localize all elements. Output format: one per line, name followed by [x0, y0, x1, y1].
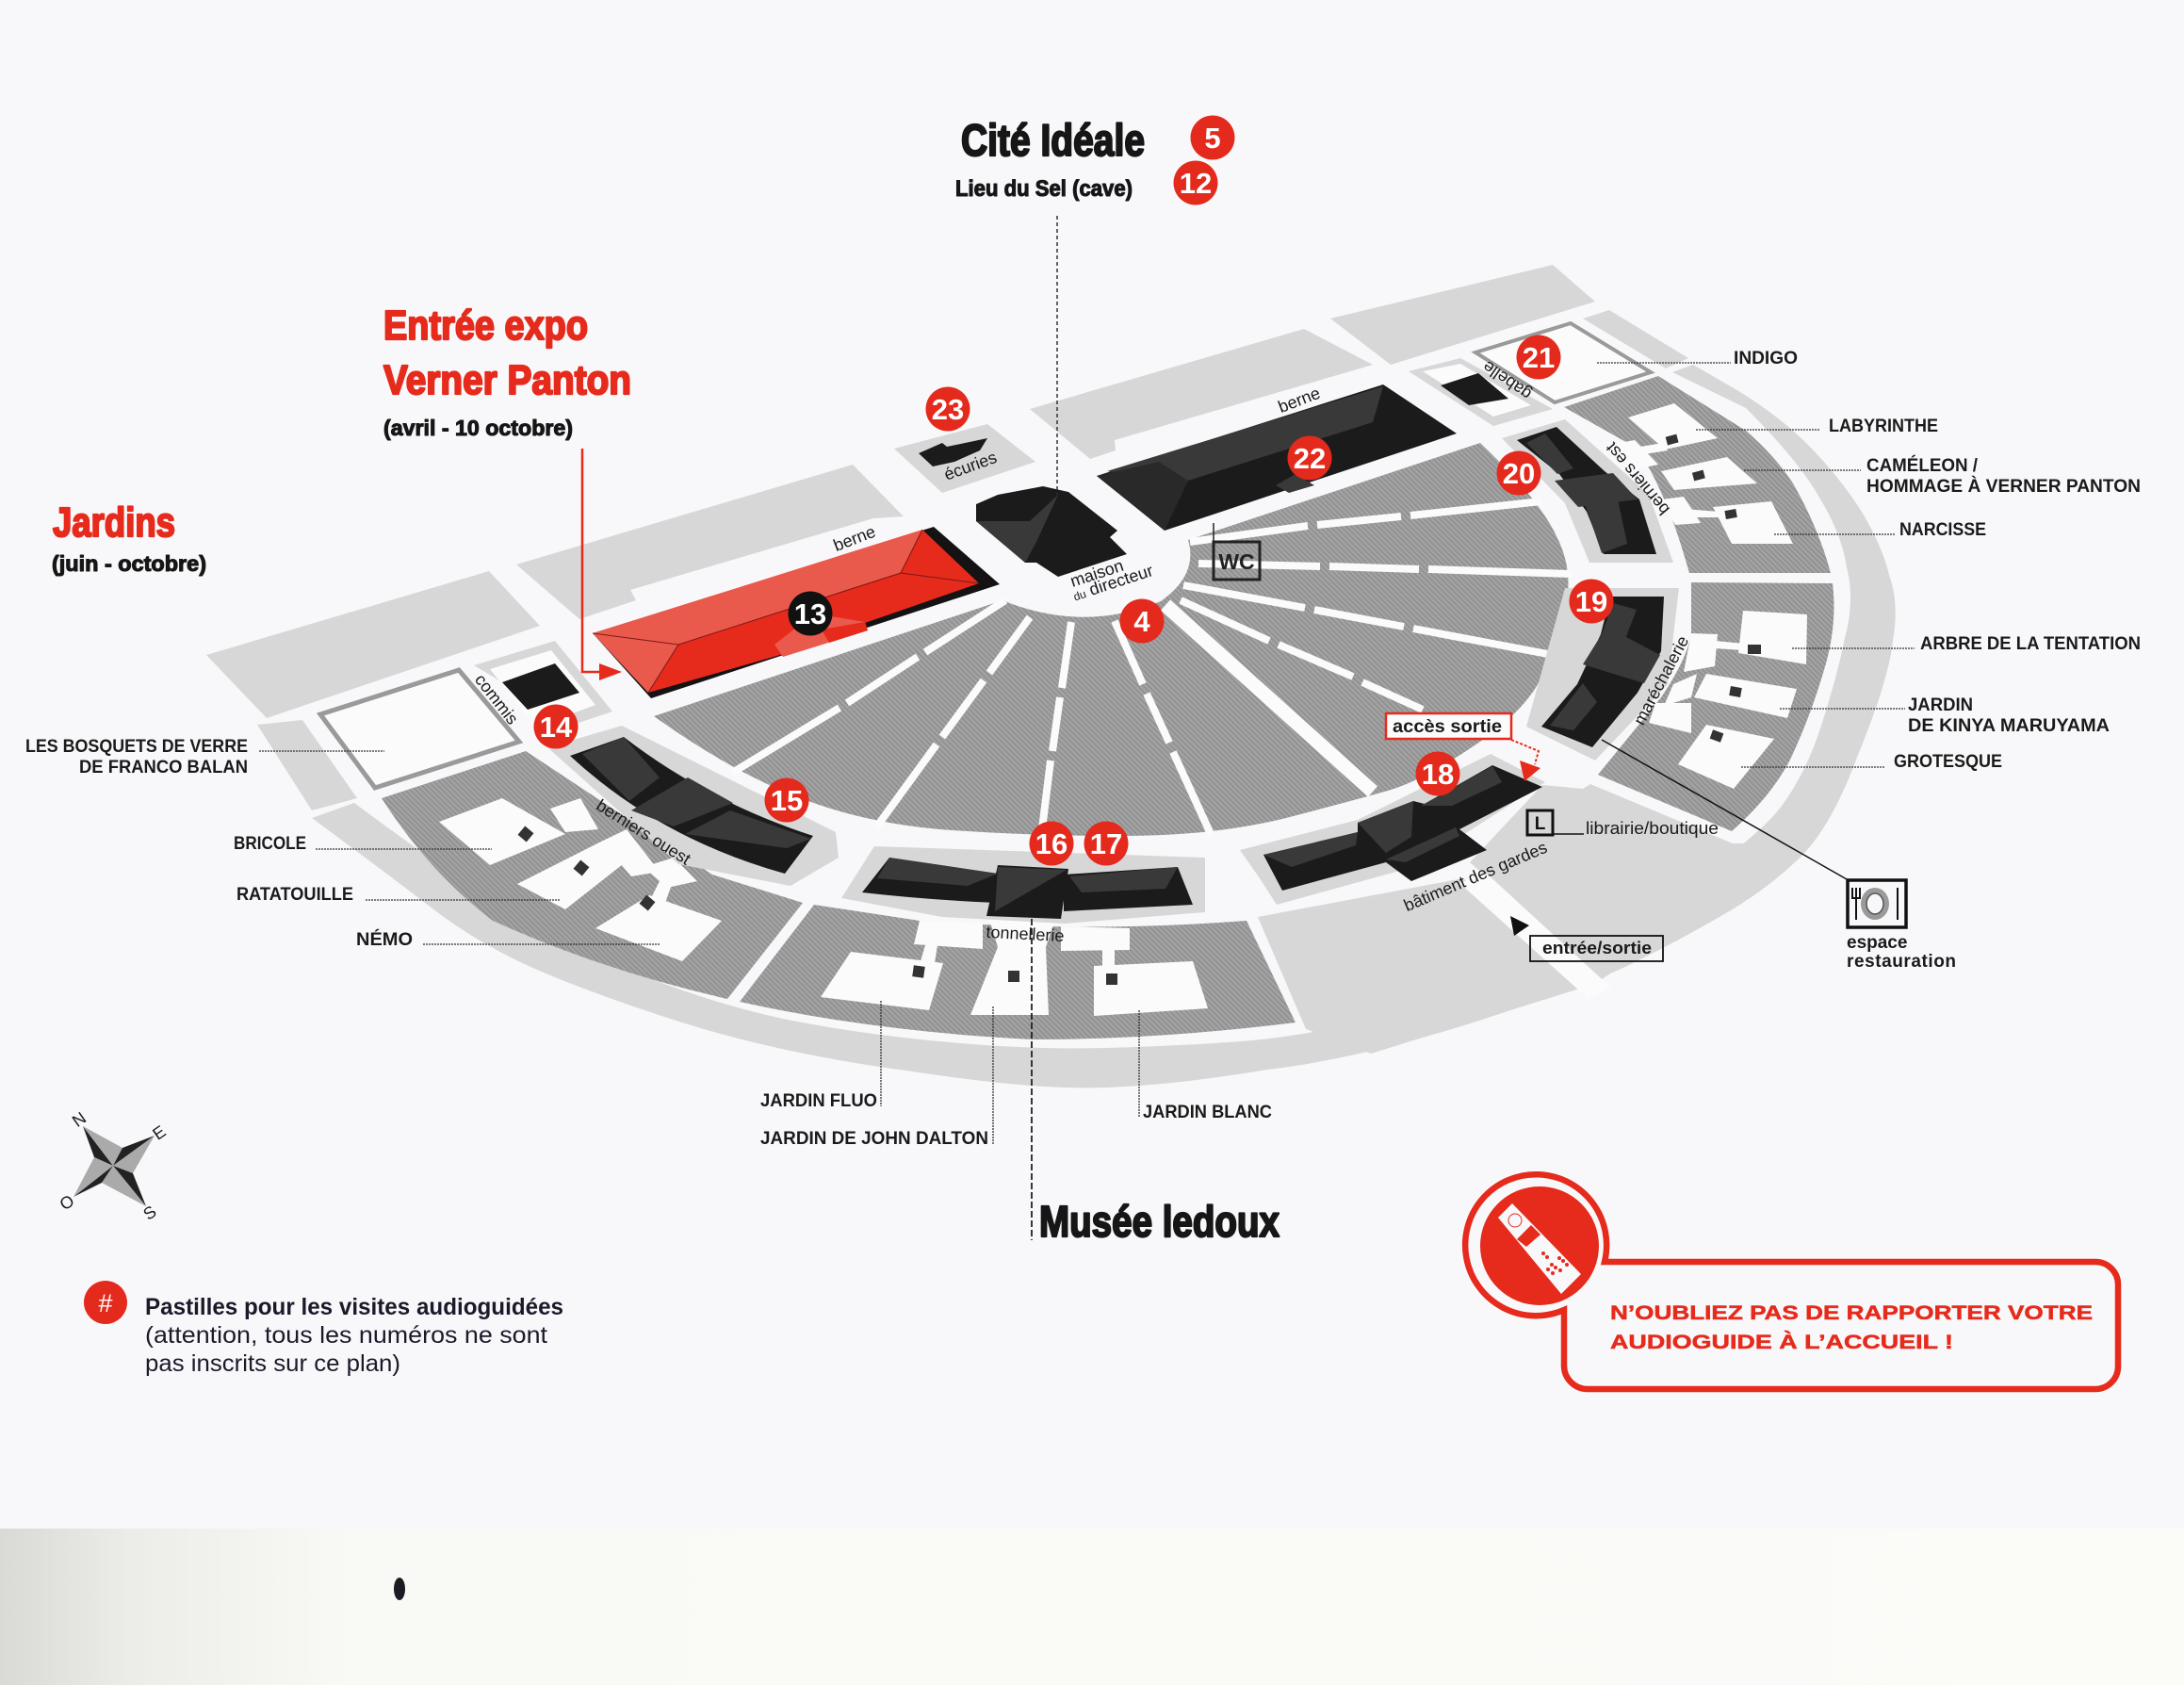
icon: phone audioguide	[1480, 1186, 1599, 1305]
left strip block	[257, 720, 357, 810]
scan blot	[394, 1578, 405, 1600]
marker 14: 14	[540, 711, 573, 744]
entree sortie sign	[1510, 916, 1663, 961]
heading: verner panton: Verner Panton	[383, 357, 631, 403]
marker 23: 23	[932, 393, 964, 426]
heading: entree expo: Entrée expo	[383, 303, 588, 349]
librairie boutique sign: L	[1535, 814, 1546, 834]
marker 22: 22	[1294, 442, 1326, 475]
top left lawn block	[206, 571, 540, 718]
garden sector south-east	[1598, 582, 1834, 831]
heading: lieu du sel: Lieu du Sel (cave)	[955, 176, 1133, 202]
marker 5	[1191, 115, 1234, 160]
compass rose: E	[149, 1121, 170, 1144]
label: du directeur: du directeur	[1070, 561, 1155, 604]
restaurant leader line	[1602, 740, 1847, 879]
label: les bosquets de verre	[25, 737, 384, 777]
garden pavilions	[518, 434, 1761, 985]
building: commis	[502, 663, 579, 710]
garden name labels	[25, 349, 2141, 1149]
marker 15: 15	[771, 784, 803, 817]
white court of gabelle pavilion	[1423, 364, 1531, 417]
label: cameleon	[1744, 455, 2141, 497]
building: marechalerie	[1541, 597, 1664, 747]
marker 4	[1119, 599, 1165, 643]
white court of commis pavilion	[490, 650, 595, 716]
label: jardin fluo	[760, 1001, 881, 1111]
label: batiment des gardes: bâtiment des gardes	[1401, 838, 1550, 915]
marker 21: 21	[1523, 341, 1555, 374]
forecourt wedge west	[1258, 878, 1583, 1054]
garden sector south	[740, 905, 1296, 1039]
label: berniers ouest: berniers ouest	[593, 795, 694, 869]
label: espace restauration: espace	[1847, 933, 1907, 953]
label: berne est: berne	[1276, 384, 1323, 417]
label: jardin fluo: JARDIN FLUO	[760, 1091, 877, 1111]
callout text: AUDIOGUIDE À L’ACCUEIL !	[1610, 1332, 1953, 1353]
lower scan strip	[0, 1529, 2184, 1685]
legend text: Pastilles pour les visites audioguidées	[145, 1294, 563, 1320]
garden sector north-east	[1564, 376, 1831, 573]
marker 19	[1570, 579, 1613, 624]
entree sortie sign: entrée/sortie	[1542, 939, 1652, 957]
legend marker	[84, 1281, 127, 1324]
callout text	[1610, 1302, 2093, 1353]
label: maison: maison	[1068, 556, 1126, 591]
label: commis: commis	[471, 670, 522, 728]
dates: juin - octobre: (juin - octobre)	[52, 551, 206, 576]
garden square: indigo	[1475, 323, 1651, 402]
marker 5: 5	[1204, 122, 1221, 155]
legend text	[145, 1294, 563, 1377]
marker 21	[1517, 335, 1560, 379]
label: tonnellerie: tonnellerie	[986, 923, 1065, 945]
callout: audioguide reminder	[1465, 1174, 2118, 1389]
label: jardin de kinya maruyama	[1780, 695, 2110, 736]
white garden rooms	[439, 403, 1807, 1016]
central fan courtyard	[654, 443, 1568, 836]
marker 20: 20	[1503, 457, 1535, 490]
building: exposition Verner Panton, berne ouest	[593, 527, 1000, 698]
marker 19: 19	[1575, 585, 1607, 618]
red entrance arrow	[582, 449, 622, 680]
building: batiment des gardes	[1263, 765, 1542, 891]
librairie boutique sign	[1527, 810, 1719, 838]
top centre lawn block	[1030, 329, 1373, 459]
dates: avril - 10 octobre: (avril - 10 octobre)	[383, 416, 573, 440]
callout outline: box merged with circle	[1465, 1174, 2118, 1389]
label: indigo: INDIGO	[1734, 349, 1798, 368]
label: jardin de kinya maruyama: JARDIN	[1908, 695, 1973, 715]
heading: jardins: Jardins	[53, 499, 175, 546]
legend text: pas inscrits sur ce plan)	[145, 1350, 400, 1377]
marker 12	[1174, 160, 1217, 205]
marker 22	[1287, 435, 1332, 481]
label: ratatouille: RATATOUILLE	[236, 885, 353, 905]
label: gabelle: gabelle	[1479, 357, 1535, 404]
dashed line to cite ideale	[1056, 216, 1058, 495]
label: les bosquets de verre: DE FRANCO BALAN	[79, 758, 248, 777]
compass rose	[57, 1108, 170, 1224]
marker 18: 18	[1422, 758, 1454, 791]
red dotted exit arrow	[1511, 740, 1540, 781]
acces sortie sign	[1386, 713, 1511, 739]
building: berniers est	[1517, 427, 1656, 554]
legend marker: #	[98, 1289, 113, 1317]
site plan	[206, 265, 1896, 1088]
garden sector south-west	[382, 751, 803, 999]
label: arbre de la tentation: ARBRE DE LA TENTATION	[1920, 634, 2141, 654]
marker 23	[925, 386, 970, 432]
top lawn block	[516, 465, 904, 619]
label: jardin de john dalton: JARDIN DE JOHN DALTON	[760, 1129, 988, 1149]
outer garden band	[312, 365, 1896, 1088]
label: cameleon: HOMMAGE À VERNER PANTON	[1866, 476, 2141, 497]
marker 15	[765, 778, 808, 822]
marker 18	[1415, 752, 1460, 795]
compass rose: O	[57, 1191, 77, 1214]
marker 14	[533, 705, 579, 748]
label: berne: berne	[831, 522, 878, 555]
building: berniers ouest	[570, 737, 813, 874]
WC sign	[1214, 523, 1260, 580]
compass rose: S	[139, 1202, 160, 1224]
building: tonnellerie	[862, 858, 1193, 919]
marker 12: 12	[1180, 167, 1212, 200]
marker 20	[1496, 450, 1541, 496]
building: gabelle	[1441, 373, 1508, 405]
entrance road	[1459, 874, 1611, 999]
garden square: les bosquets de verre	[320, 670, 519, 788]
marker 13: 13	[794, 597, 826, 630]
librairie boutique sign: librairie/boutique	[1586, 819, 1719, 838]
label: espace restauration: restauration	[1847, 952, 1956, 972]
dashed line to musee	[1031, 919, 1033, 1240]
label: jardin de kinya maruyama: DE KINYA MARUYAMA	[1908, 716, 2110, 736]
label: cameleon: CAMÉLEON /	[1866, 455, 1979, 476]
marker 16: 16	[1035, 827, 1068, 860]
building: berne est	[1097, 384, 1457, 531]
heading: cite ideale: Cité Idéale	[961, 115, 1145, 165]
label: marechalerie: maréchalerie	[1630, 632, 1692, 728]
marker 17	[1084, 822, 1129, 865]
compass rose: N	[69, 1108, 90, 1131]
WC sign: WC	[1218, 549, 1255, 574]
courtyard spokes	[732, 501, 1572, 834]
building: ecuries	[919, 438, 987, 466]
label: les bosquets de verre: LES BOSQUETS DE VERRE	[25, 737, 248, 757]
marker 16	[1029, 822, 1074, 865]
top right strip	[1583, 310, 1688, 368]
label: labyrinthe: LABYRINTHE	[1829, 417, 1938, 436]
label: narcisse: NARCISSE	[1899, 520, 1986, 540]
heading: musee ledoux: Musée ledoux	[1039, 1197, 1279, 1246]
legend text: (attention, tous les numéros ne sont	[145, 1322, 547, 1349]
label: jardin blanc: JARDIN BLANC	[1143, 1103, 1272, 1122]
building pads	[474, 358, 1679, 924]
marker 4: 4	[1133, 605, 1150, 638]
acces sortie sign: accès sortie	[1393, 717, 1502, 737]
building: maison du directeur	[976, 486, 1127, 577]
label: grotesque: GROTESQUE	[1894, 752, 2002, 772]
label: bricole: BRICOLE	[234, 834, 306, 854]
callout text: N’OUBLIEZ PAS DE RAPPORTER VOTRE	[1610, 1302, 2093, 1324]
forecourt wedge east	[1470, 784, 1752, 979]
marker 17: 17	[1090, 827, 1122, 860]
label: ecuries: écuries	[941, 448, 1000, 484]
icon: plate and cutlery	[1848, 880, 1906, 927]
label: berniers est: berniers est	[1602, 439, 1673, 518]
label: nemo: NÉMO	[356, 929, 413, 950]
marker 13	[788, 592, 833, 635]
top right lawn block	[1330, 265, 1595, 365]
